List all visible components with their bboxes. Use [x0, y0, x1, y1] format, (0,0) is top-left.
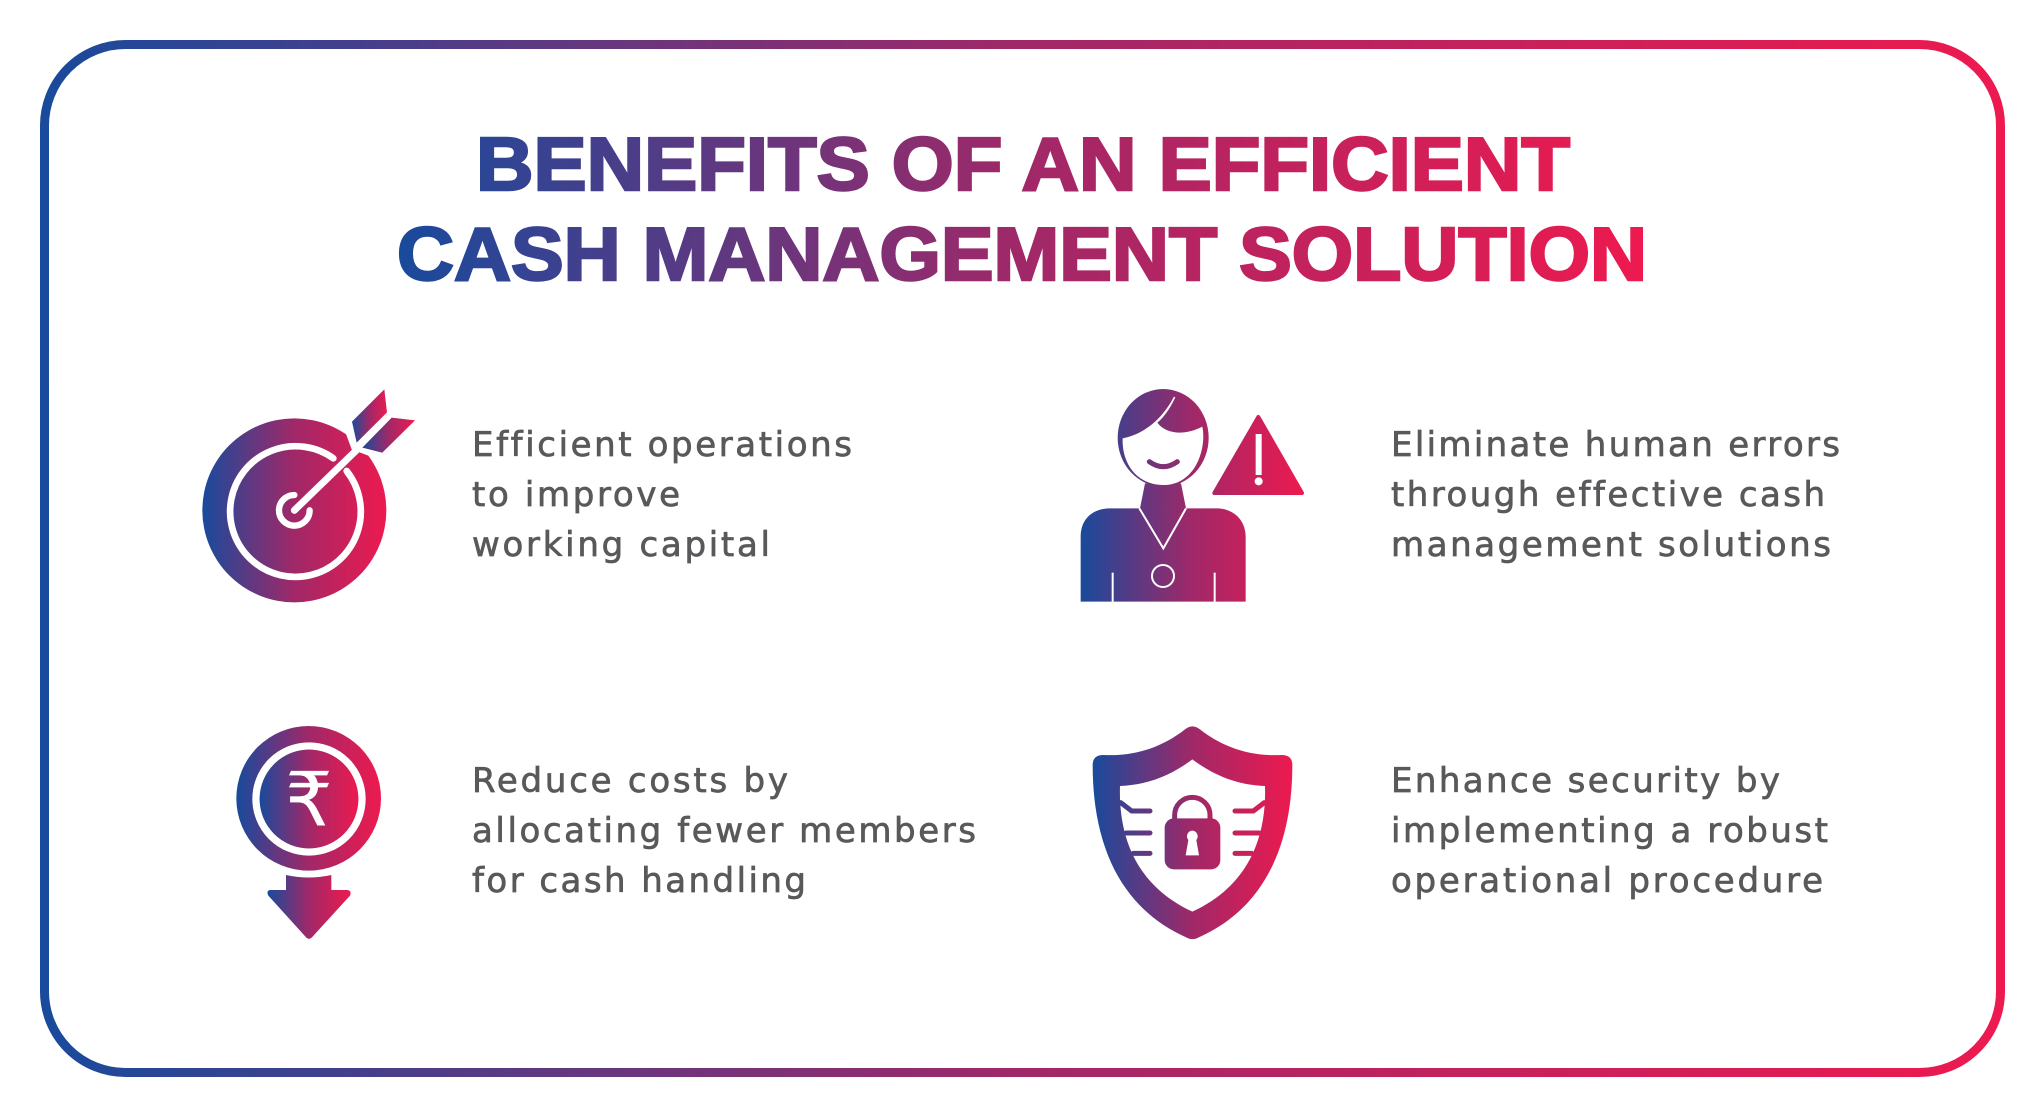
panel: enhance security: [1093, 726, 1828, 939]
text: eliminate human errors: through effective cash: [1391, 475, 1825, 515]
panel: eliminate human errors: [1081, 389, 1840, 602]
text: eliminate human errors: management solutions: [1391, 525, 1831, 565]
text: eliminate human errors: [1391, 425, 1840, 565]
text: reduce costs: for cash handling: [472, 861, 806, 901]
text: efficient operations: [472, 425, 852, 565]
text: reduce costs: allocating fewer members: [472, 811, 976, 851]
text: enhance security: implementing a robust: [1391, 811, 1828, 851]
text: enhance security: [1391, 761, 1828, 901]
icon: target with arrow: [202, 389, 415, 602]
title: CASH MANAGEMENT SOLUTION: [397, 212, 1647, 296]
text: eliminate human errors: Eliminate human errors: [1391, 425, 1840, 465]
text: reduce costs: Reduce costs by: [472, 761, 788, 801]
panel: reduce costs: [236, 726, 976, 939]
text: reduce costs: [472, 761, 976, 901]
panel: efficient operations: [202, 389, 852, 602]
text: efficient operations: working capital: [472, 525, 770, 565]
icon: rupee coin with down arrow: [236, 726, 381, 939]
text: efficient operations: to improve: [472, 475, 680, 515]
text: enhance security: operational procedure: [1391, 861, 1823, 901]
text: efficient operations: Efficient operations: [472, 425, 852, 465]
icon: shield with padlock: [1093, 726, 1292, 939]
icon: person with warning triangle: [1081, 389, 1302, 602]
text: enhance security: Enhance security by: [1391, 761, 1780, 801]
icon: rupee coin with down arrow: ₹: [285, 756, 333, 844]
title: BENEFITS OF AN EFFICIENT: [476, 122, 1570, 206]
title: [397, 122, 1647, 296]
